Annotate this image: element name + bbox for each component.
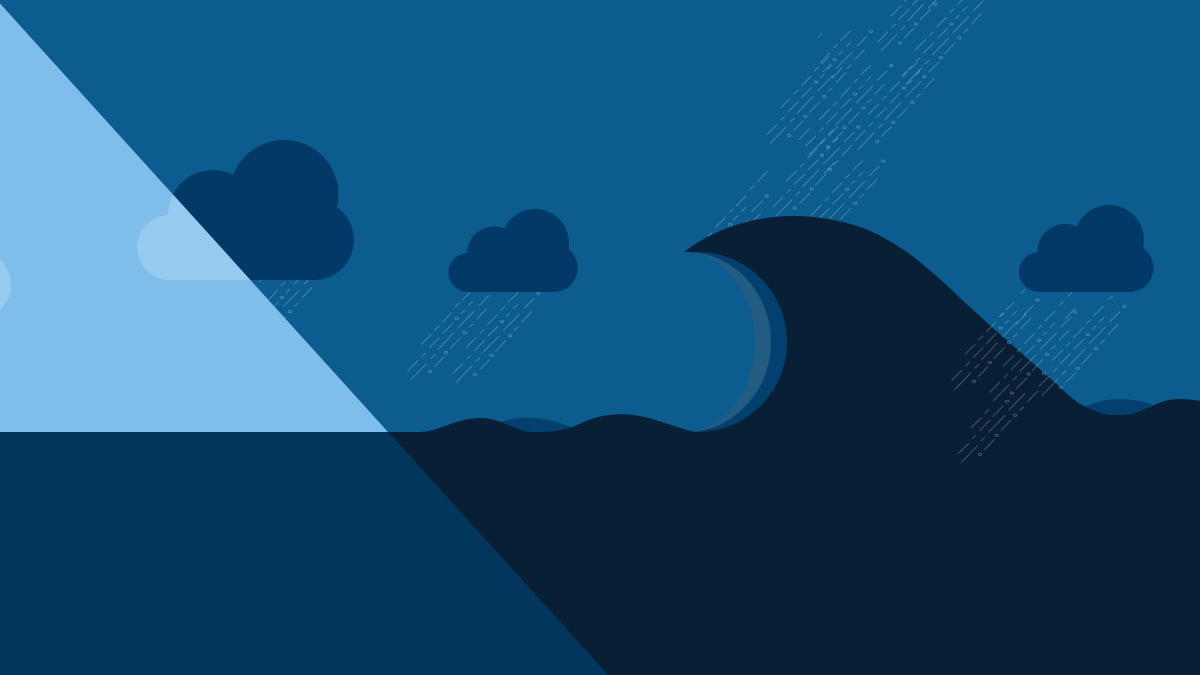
rain: under large cloud [233,268,320,359]
wave curl: hollow of the wave [684,252,755,432]
rain: upper storm band [708,0,989,250]
main dark wave [388,216,1200,675]
wave curl: outer crescent [684,252,787,432]
cloud: large, left [137,140,354,280]
light cloud: partial at left edge [0,251,11,319]
light cloud: daylight part of large cloud [137,194,250,280]
light triangle: daylight side [0,4,388,432]
back wave hump: middle [495,418,578,436]
cloud: right [1019,205,1154,292]
back wave hump: right [1082,399,1160,420]
wave curl: inner crescent [684,252,771,432]
rain: under right cloud, overlapping wave [952,289,1126,463]
dark sea: daylight side [0,432,608,675]
rain: under middle cloud [408,292,540,383]
cloud: middle [448,209,578,292]
